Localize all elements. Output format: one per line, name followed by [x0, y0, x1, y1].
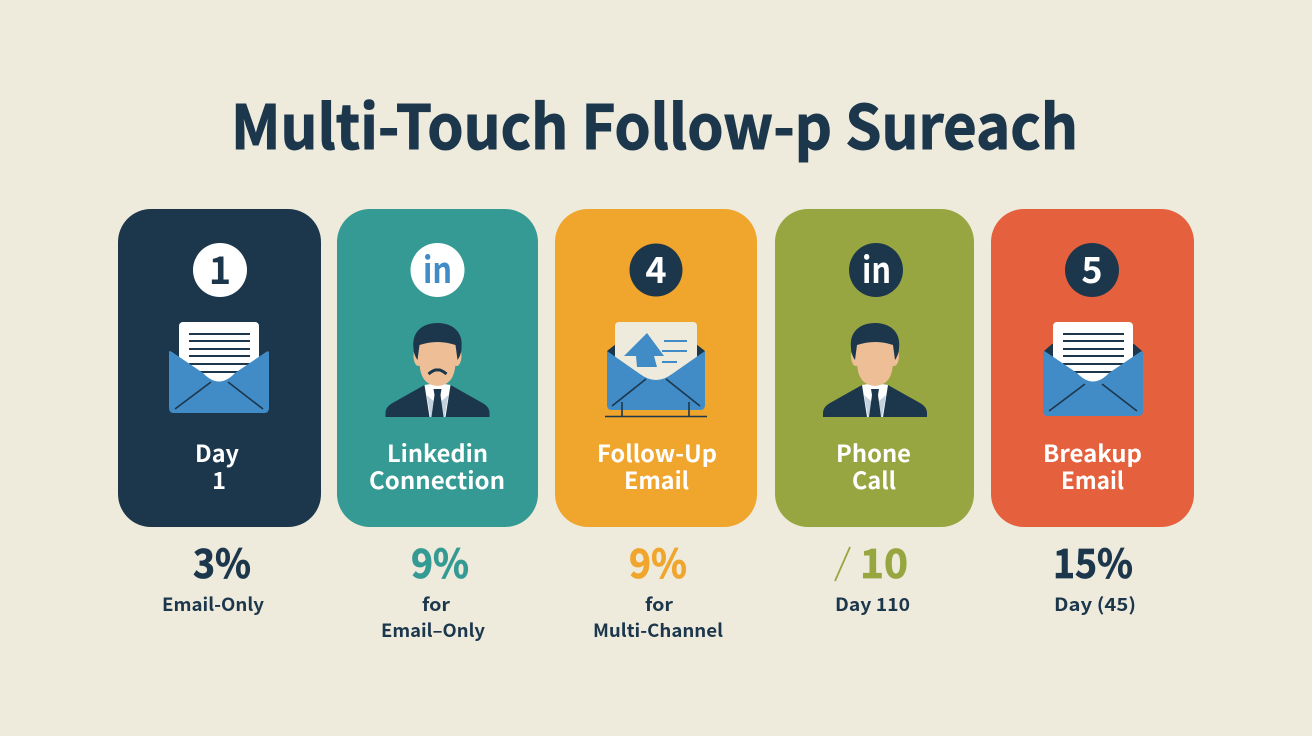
stat: 9% for multi-channel: 9% [629, 532, 687, 590]
icon: envelope with upload arrow [605, 322, 707, 416]
badge: linkedin [410, 242, 464, 297]
stat: 15% day 45 [1053, 532, 1136, 617]
label: Follow-Up Email: Email [624, 462, 689, 496]
title: Multi-Touch Follow-p Sureach [231, 78, 1078, 167]
badge: linkedin dark: in [862, 242, 891, 294]
badge: number 4: 4 [645, 242, 667, 294]
stat: /10 day 110 [835, 532, 910, 617]
stat: 3% email-only: Email-Only [162, 591, 265, 617]
panel: step 2 linkedin connection [337, 209, 538, 527]
label: Phone Call [836, 435, 911, 496]
badge: number 5 [1065, 242, 1119, 297]
panel: step 1 day 1 [118, 209, 321, 527]
stat: /10 day 110: Day 110 [835, 591, 910, 617]
stat: 15% day 45: Day (45) [1054, 591, 1136, 617]
stat: 3% email-only [162, 532, 265, 617]
label: Breakup Email: Breakup [1043, 435, 1142, 469]
label: Linkedin Connection [369, 435, 505, 496]
stat: 9% for multi-channel: for [645, 591, 673, 617]
panel: step 5 breakup email [991, 209, 1194, 527]
stat: 9% for multi-channel: Multi-Channel [593, 617, 723, 643]
stat: /10 day 110: 10 [860, 532, 908, 590]
label: Day 1: Day [195, 435, 239, 469]
badge: number 5: 5 [1081, 242, 1103, 294]
panel: step phone call [775, 209, 974, 527]
badge: linkedin dark [849, 242, 903, 297]
stat: 3% email-only: 3% [193, 532, 251, 590]
label: Follow-Up Email [597, 435, 717, 496]
label: Phone Call: Call [852, 462, 896, 496]
stat: 9% for email-only: Email–Only [381, 617, 486, 643]
label: Day 1 [195, 435, 239, 496]
icon: envelope with letter [169, 322, 269, 413]
badge: number 1: 1 [209, 240, 231, 295]
label: Follow-Up Email: Follow-Up [597, 435, 717, 469]
panel: step 4 follow-up email [555, 209, 757, 527]
icon: person [823, 323, 927, 417]
icon: person with moustache [386, 323, 490, 417]
label: Linkedin Connection: Connection [369, 462, 505, 496]
label: Linkedin Connection: Linkedin [387, 435, 488, 469]
badge: linkedin: in [423, 242, 452, 294]
label: Breakup Email [1043, 435, 1142, 496]
label: Day 1: 1 [212, 462, 226, 496]
stat: 9% for email-only [381, 532, 486, 643]
stat: 9% for email-only: for [422, 591, 450, 617]
stat: 9% for email-only: 9% [411, 532, 469, 590]
stat: 15% day 45: 15% [1053, 532, 1133, 590]
label: Phone Call: Phone [836, 435, 911, 469]
icon: envelope with letter [1043, 322, 1143, 416]
badge: number 4 [630, 242, 682, 296]
stat: 9% for multi-channel [593, 532, 723, 643]
label: Breakup Email: Email [1061, 462, 1124, 496]
badge: number 1 [193, 240, 247, 297]
